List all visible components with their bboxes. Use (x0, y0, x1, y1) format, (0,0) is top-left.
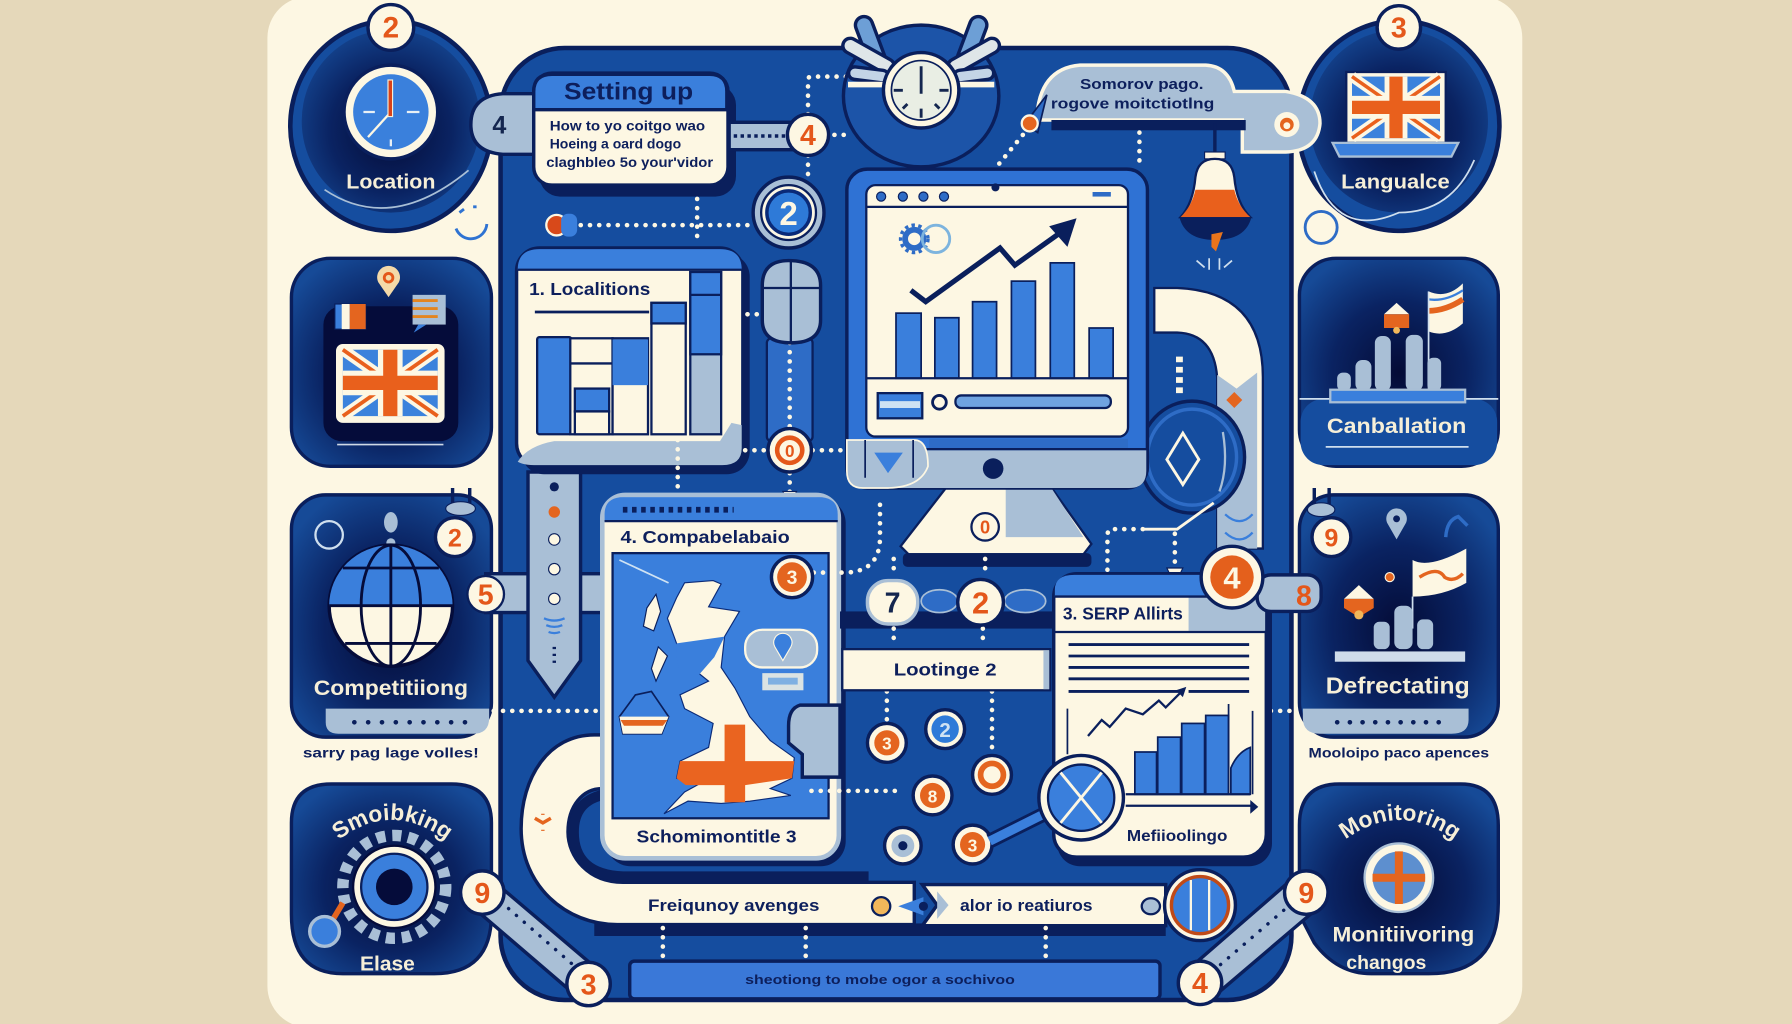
badge: 9: 9 (1324, 524, 1338, 552)
icon: french flag (335, 304, 366, 329)
badge: 9 (461, 871, 504, 914)
map: england cross (677, 725, 794, 802)
badge: map 3 (771, 557, 813, 598)
badge: 5: 5 (478, 580, 494, 612)
line chart (1088, 687, 1186, 736)
connector dots bottom (663, 928, 1046, 958)
icon: speech flag (413, 295, 446, 333)
badge: 3 (1377, 6, 1421, 49)
tab: 4: 4 (492, 112, 506, 140)
map: callout (745, 630, 817, 690)
panel: monitoring (1298, 782, 1500, 976)
badge: 4: 4 (800, 120, 816, 152)
map: great britain (664, 581, 794, 814)
bubble text: rogove moitctiotlng (1051, 97, 1214, 113)
pill: small blue left (921, 590, 958, 613)
band: lootinge (842, 649, 1050, 690)
icon: mouse (762, 261, 821, 343)
big lens (1139, 401, 1245, 513)
dark shadow under band (594, 923, 1166, 936)
small orange spark (535, 814, 551, 831)
icon: round flag (1365, 843, 1433, 912)
badge: 8: 8 (1296, 581, 1312, 613)
badge: 9 (1285, 871, 1328, 914)
icon: right wing (955, 25, 992, 77)
tab behind badge (1257, 575, 1321, 611)
panel: alert bubble (1022, 65, 1320, 152)
icon: ring lens (1142, 870, 1235, 941)
badge: orange 3 (953, 825, 992, 864)
main blue board (501, 48, 1291, 1000)
connector dark strip (840, 611, 1057, 629)
badge: 4: 4 (1192, 968, 1208, 1000)
cream sheet (267, 0, 1522, 1024)
panel: language (1298, 21, 1499, 231)
trend arrow (911, 218, 1077, 302)
arc label: monitoring: Monitoring (1338, 804, 1460, 842)
label: defrectating: Defrectating (1326, 673, 1470, 699)
browser dots (877, 192, 1111, 201)
badge: blue 2 (926, 710, 965, 749)
mouse strip (767, 338, 813, 441)
white link to lens (1143, 503, 1214, 529)
curved white pipe (1154, 288, 1263, 549)
connector dots (494, 709, 602, 713)
panel: comparison map (602, 495, 846, 866)
label: location: Location (346, 171, 435, 194)
footer bar (326, 709, 489, 734)
tab: 4 (471, 94, 534, 154)
title: serp alerts: 3. SERP Allirts (1063, 603, 1183, 623)
icon: pin (1386, 508, 1407, 539)
map: islands (643, 594, 667, 681)
connector dots top (571, 77, 848, 245)
icon: gear dial (343, 835, 446, 938)
footer: comparison: Schomimontitle 3 (637, 826, 797, 846)
label: frequency: Freiqunoy avenges (648, 896, 819, 915)
badge: 9 (1312, 518, 1351, 557)
tall down arrow (528, 472, 581, 697)
badge: orange 3: 3 (882, 734, 892, 754)
icon: bars (1335, 606, 1465, 662)
icon: bars (1330, 335, 1465, 402)
arc label: smoibking: Smoibking (332, 803, 452, 842)
badge: target (885, 827, 921, 864)
icon: laptop flag (1333, 72, 1458, 157)
connector dots right (1271, 709, 1296, 713)
badge: stand 0 (971, 513, 999, 541)
icon: bell (1179, 123, 1251, 270)
badge: 2: 2 (383, 12, 399, 45)
badge: big 4 (1201, 546, 1263, 608)
icon: magnifier (990, 755, 1123, 841)
arrow tip (783, 491, 797, 505)
badge: orange 0 (973, 755, 1011, 794)
badge: 9: 9 (1298, 878, 1314, 910)
icon: orange house (1384, 303, 1409, 334)
badge: 2: 2 (448, 524, 462, 552)
label: monitoring changes: changos (1346, 952, 1426, 974)
icon: location dot (384, 512, 398, 547)
title: setting up: Setting up (564, 78, 693, 105)
icon: map pin (377, 266, 400, 297)
bar chart (1067, 704, 1253, 794)
panel: defrectating (1299, 495, 1498, 737)
badge: orange 8 (913, 776, 952, 815)
badge: 0 (768, 429, 811, 472)
connector chain (1176, 357, 1182, 394)
map (613, 553, 829, 818)
label: bottom bar: sheotiong to mobe ogor a sochivoo (745, 972, 1015, 987)
arrow tip (1167, 568, 1183, 585)
label: monitoring changes (1333, 922, 1474, 974)
badge: 7: 7 (885, 588, 901, 620)
plug icon (446, 488, 475, 515)
pill: small blue right (1005, 590, 1046, 613)
icon: band arrow (872, 891, 949, 919)
icon: orange house (1344, 573, 1394, 619)
icon: gear and ring (901, 225, 950, 253)
bar chart (537, 272, 721, 434)
icon: clock (344, 65, 438, 159)
caption: left: sarry pag lage volles! (303, 746, 479, 762)
badge: 9: 9 (474, 878, 490, 910)
map: ireland (619, 691, 669, 734)
badge: 7 (867, 581, 918, 624)
card text: Hoeing a oard dogo (550, 137, 681, 152)
card text (546, 118, 714, 170)
label: competitioning: Competitiiong (314, 675, 468, 700)
badge: orange 3 (867, 723, 906, 762)
footer bar (1303, 709, 1469, 734)
monitor stand (901, 485, 1091, 567)
badge: 0: 0 (785, 441, 794, 461)
badge: 4 (1178, 961, 1222, 1005)
small ring (1305, 211, 1337, 243)
icon: flag (1429, 283, 1463, 389)
bubble text (1051, 77, 1214, 113)
icon: pencil (1022, 95, 1047, 133)
label: canballation: Canballation (1327, 413, 1466, 438)
panel: localitions (517, 248, 750, 474)
label: monitoring changes: Monitiivoring (1333, 922, 1474, 947)
badge: 3: 3 (581, 969, 597, 1001)
bottom bar (630, 961, 1160, 999)
icon: clock face (883, 53, 959, 128)
connector dots around cards (678, 314, 851, 494)
axis (1126, 794, 1258, 814)
icon: lens 2 (753, 177, 824, 248)
bubble text: Somorov pago. (1080, 77, 1203, 93)
connector from map badge (811, 503, 1175, 791)
panel: competitioning (291, 495, 491, 737)
slider row (878, 393, 1111, 418)
panel: flags (291, 258, 491, 466)
label: language: Langualce (1341, 171, 1450, 194)
badge: 2 (368, 5, 414, 50)
diagonal connector right (1189, 878, 1321, 997)
badge: 2 (958, 579, 1003, 625)
panel: smoibking (290, 782, 494, 976)
big U pipe (521, 735, 914, 925)
connector dots top right (997, 133, 1139, 167)
label: features: alor io reatiuros (960, 896, 1093, 915)
footer: serp: Mefiioolingo (1127, 828, 1227, 845)
badge: stand 0: 0 (980, 517, 990, 538)
icon: lens 2: 2 (779, 196, 798, 233)
panel: setting up (471, 73, 736, 197)
icon: flag (1413, 549, 1466, 629)
title: comparison: 4. Compabelabaio (621, 527, 790, 547)
card text: claghbleo 5o your'vidor (546, 155, 714, 170)
icon: small spinner (456, 207, 487, 239)
badge: big 4: 4 (1223, 561, 1241, 596)
connector band to badge (729, 122, 795, 150)
diagonal connector left (473, 882, 600, 997)
panel: canballation (1299, 258, 1498, 466)
connector band behind arrow (486, 574, 602, 613)
icon: knob (310, 903, 343, 946)
map: blue band (676, 637, 725, 686)
winged clock (843, 25, 999, 167)
icon: orange eye (1274, 112, 1299, 137)
badge: 4 (787, 114, 829, 155)
icon: UK flag board (337, 345, 443, 422)
badge: 3: 3 (1391, 13, 1407, 45)
icon: orange knob (546, 214, 577, 237)
label: elase: Elase (360, 952, 415, 975)
icon: left wing (850, 25, 887, 77)
text lines (1069, 645, 1249, 691)
icon: globe (329, 545, 453, 666)
label: lootinge: Lootinge 2 (894, 659, 997, 679)
badge: 3 (567, 962, 610, 1006)
bar chart (896, 263, 1113, 378)
panel: serp alerts (1054, 574, 1272, 866)
badge: 5 (467, 576, 504, 613)
badge: blue 2: 2 (939, 719, 951, 742)
badge: orange 3: 3 (968, 835, 977, 855)
side tab (789, 705, 840, 777)
plug icon (1307, 488, 1335, 517)
badge: map 3: 3 (787, 567, 798, 589)
icon: arc (1446, 517, 1467, 537)
frequency band right part (922, 885, 1166, 926)
title: localitions: 1. Localitions (529, 279, 650, 299)
inner pipe shadow (574, 794, 869, 877)
panel: location (290, 21, 491, 231)
badge: 2: 2 (972, 586, 989, 621)
panel: monitor (847, 169, 1147, 488)
badge: 2 (435, 518, 474, 557)
caption: right: Mooloipo paco apences (1309, 746, 1489, 762)
badge: orange 8: 8 (928, 786, 937, 806)
card text: How to yo coitgo wao (550, 118, 705, 133)
